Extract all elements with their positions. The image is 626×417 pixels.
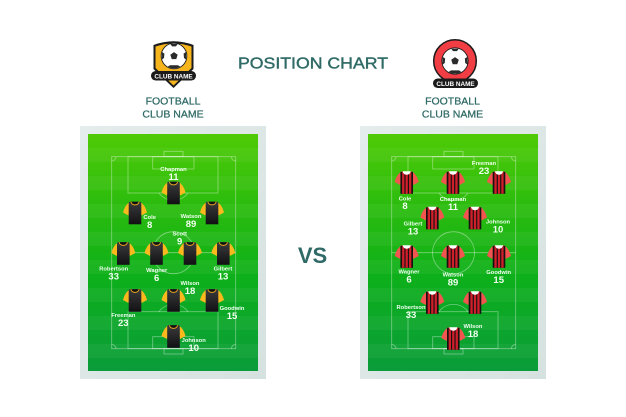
player: Johnson	[463, 206, 511, 236]
player: Goodwin	[200, 289, 245, 322]
player: Robertson: 33	[108, 272, 119, 282]
title: POSITION CHART	[238, 56, 389, 72]
player: Wagner: 6	[406, 274, 412, 286]
player: Gilbert: Gilbert	[214, 266, 232, 272]
player: Wagner: Wagner	[146, 268, 168, 274]
player: Johnson: 10	[188, 343, 199, 354]
VS label: VS	[298, 243, 327, 268]
player: Wilson: 18	[185, 286, 195, 297]
player: Scott shirt	[178, 242, 202, 265]
player: Wagner: 6	[154, 273, 159, 284]
player: Cole: 8	[402, 201, 408, 212]
player: Robertson: Robertson	[396, 305, 426, 311]
player: Cole	[395, 171, 419, 212]
left club name: FOOTBALL	[146, 96, 200, 108]
player: Goodwin: 15	[227, 311, 238, 322]
player: Wilson: Wilson	[464, 324, 483, 330]
player: Robertson: 33	[406, 310, 416, 321]
player: Johnson: Johnson	[182, 338, 206, 344]
player: Chapman: 11	[448, 202, 459, 213]
panel: left pitch	[80, 126, 266, 379]
right club name: CLUB NAME	[422, 108, 483, 120]
player: Goodwin: Goodwin	[486, 270, 512, 276]
player: Gilbert	[211, 242, 235, 282]
player: Watson: 89	[186, 219, 196, 230]
player: Cole: Cole	[399, 196, 412, 202]
player: Chapman: Chapman	[440, 197, 467, 203]
player: Chapman: 11	[168, 172, 179, 183]
icon: right club badge: CLUB NAME	[436, 81, 475, 88]
player: Johnson: 10	[493, 224, 503, 236]
player: Cole	[123, 202, 157, 231]
player: right back	[463, 291, 487, 314]
player: Wagner	[144, 242, 168, 284]
player: Wilson	[162, 281, 200, 312]
player: Scott: Scott	[172, 232, 187, 238]
icon: left club badge: CLUB NAME	[154, 73, 193, 80]
player: Gilbert: 13	[218, 272, 228, 282]
player: Goodwin: Goodwin	[220, 306, 245, 312]
player: Johnson: Johnson	[486, 220, 511, 226]
player: Watson: Watson	[181, 214, 202, 220]
player: Cole: 8	[147, 220, 152, 231]
player: Wilson: Wilson	[181, 281, 200, 287]
player: Watson: Watson	[443, 272, 464, 278]
player: Wagner: Wagner	[398, 270, 420, 276]
player: Chapman: Chapman	[160, 167, 187, 173]
player: Wagner	[395, 245, 420, 286]
player: Watson	[441, 245, 465, 288]
player: Robertson	[99, 242, 135, 282]
player: Freeman: Freeman	[472, 161, 497, 167]
player: Gilbert: Gilbert	[404, 222, 422, 228]
player: Goodwin: 15	[493, 275, 505, 286]
player: Robertson	[396, 291, 444, 321]
panel: right pitch	[360, 126, 546, 379]
player: Chapman	[440, 171, 467, 213]
player: Scott: 9	[177, 236, 182, 248]
player: Freeman: 23	[118, 318, 129, 329]
left club name: CLUB NAME	[142, 108, 204, 120]
player: Freeman: Freeman	[111, 313, 136, 319]
player: Freeman: 23	[479, 166, 489, 177]
player: Gilbert: 13	[408, 226, 418, 238]
player: Robertson: Robertson	[99, 266, 129, 272]
player: Cole: Cole	[143, 215, 157, 221]
icon: left club badge	[151, 41, 196, 88]
icon: right club badge	[433, 40, 478, 88]
player: Goodwin	[486, 245, 512, 286]
player: Watson	[181, 202, 224, 230]
player: Johnson	[162, 325, 206, 354]
player: Wilson: 18	[468, 329, 478, 340]
player: Freeman	[472, 161, 511, 194]
player: Scott	[172, 232, 187, 248]
player: Freeman	[111, 289, 147, 329]
player: Wilson	[441, 324, 483, 350]
player: Gilbert	[404, 206, 444, 238]
player: Watson: 89	[448, 278, 458, 288]
right club name: FOOTBALL	[425, 96, 480, 108]
player: Chapman	[160, 167, 187, 204]
